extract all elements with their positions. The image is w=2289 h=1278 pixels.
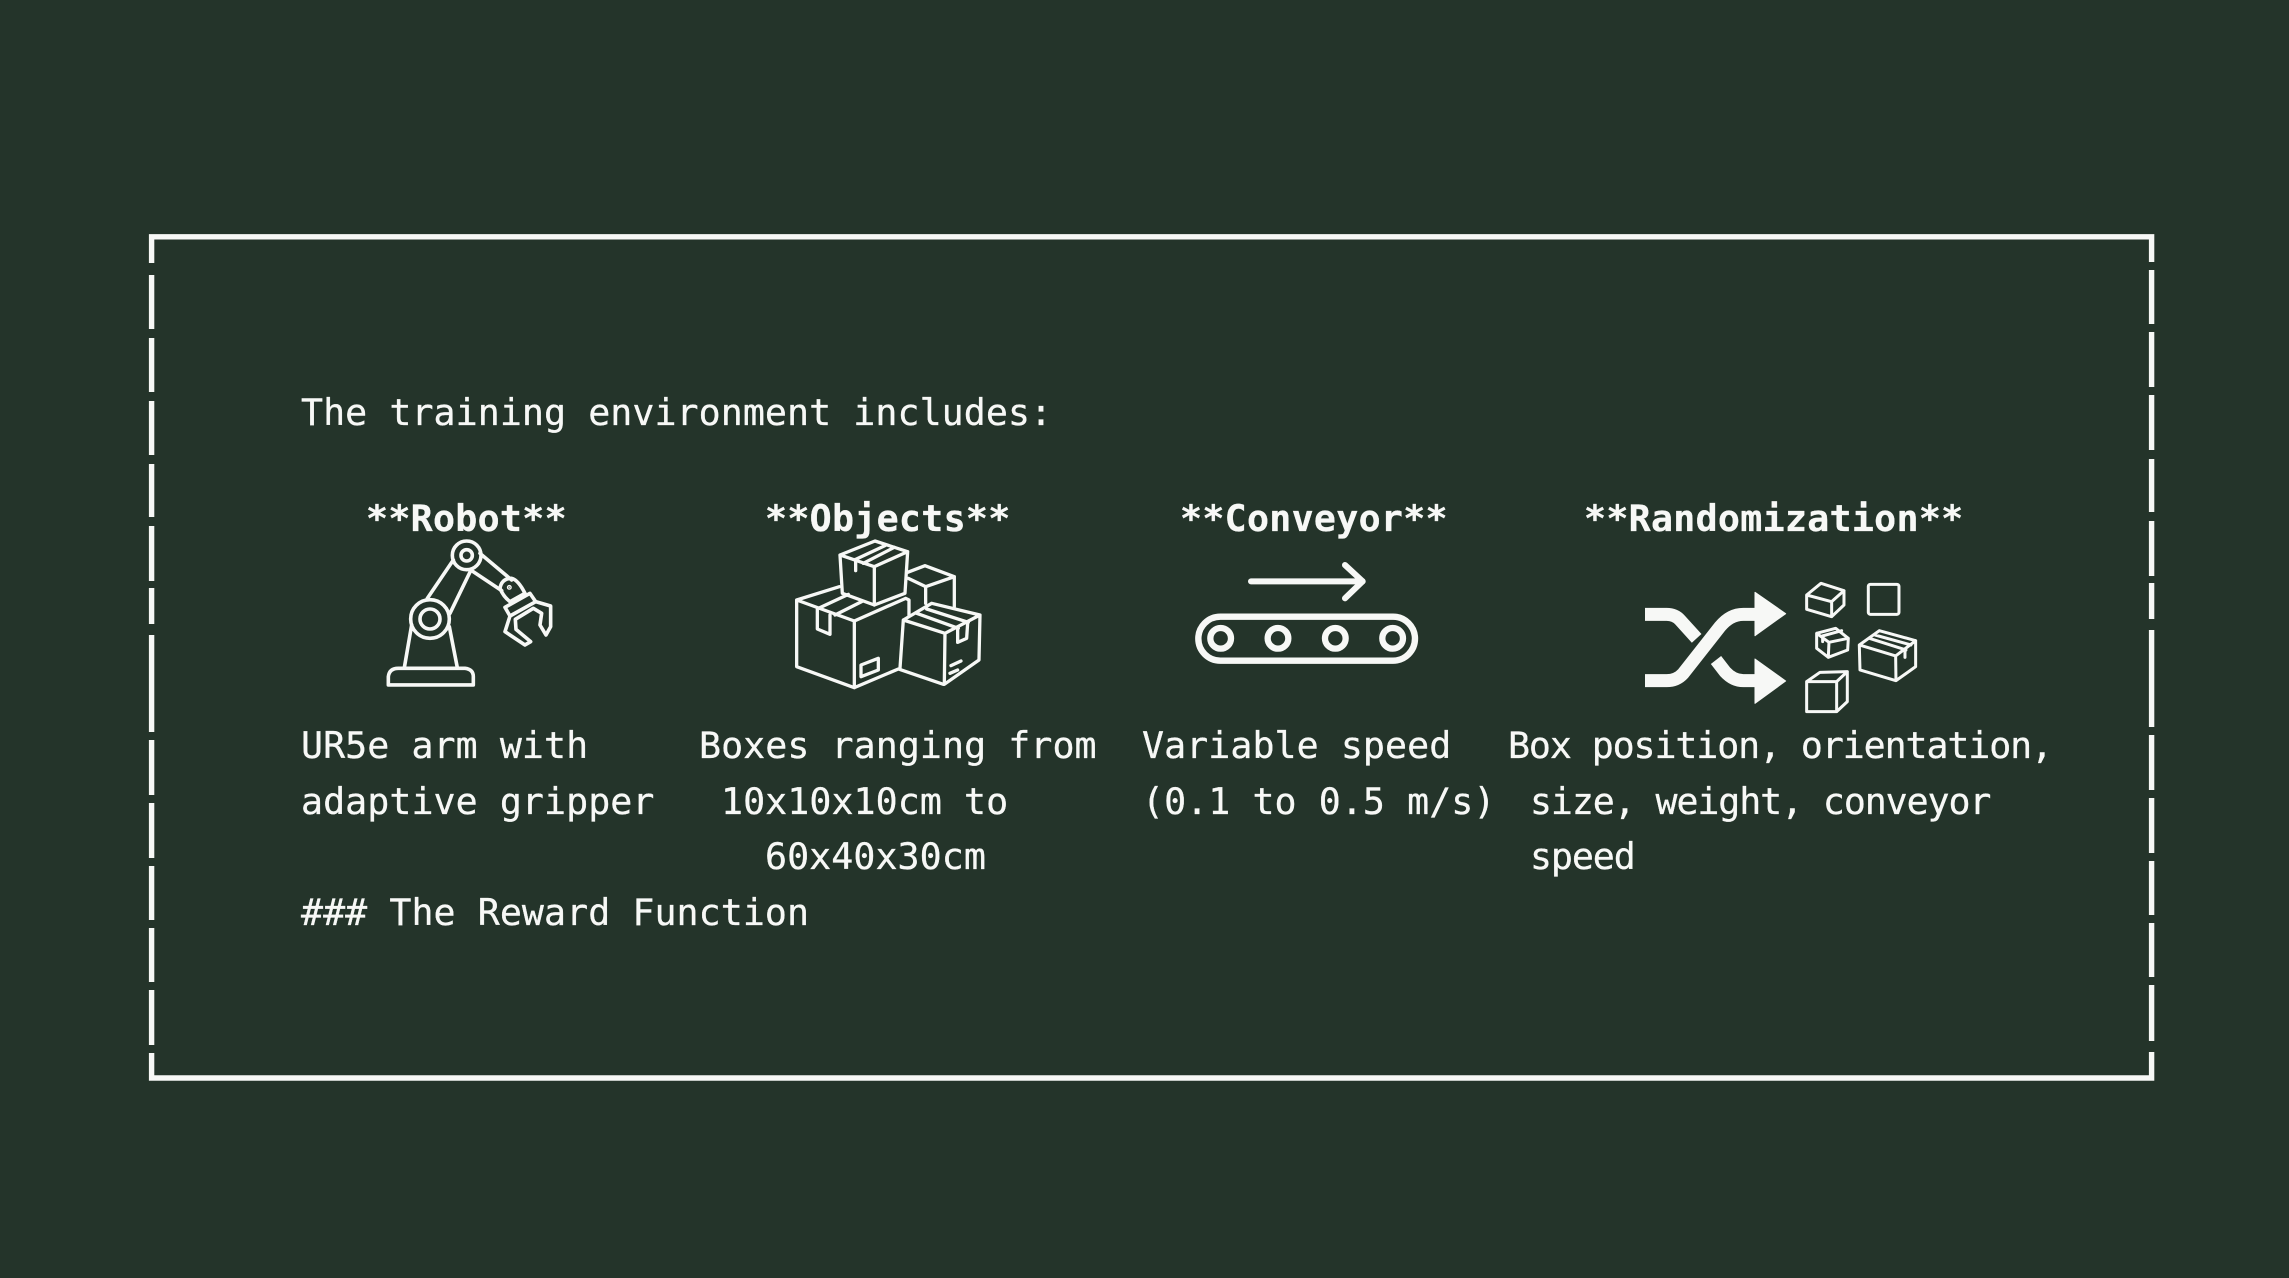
section heading text: ### The Reward Function xyxy=(301,891,809,934)
icon: stacked boxes xyxy=(795,539,982,690)
description: Randomization xyxy=(1508,724,2052,878)
description: Robot: adaptive gripper xyxy=(301,780,654,822)
panel: Robot xyxy=(301,497,654,822)
description: Objects xyxy=(699,724,1097,878)
description: Objects: 60x40x30cm xyxy=(765,835,986,878)
heading: Robot: **Robot** xyxy=(366,497,567,540)
heading: Conveyor: **Conveyor** xyxy=(1180,497,1448,540)
description: Robot xyxy=(301,724,654,822)
dashed frame xyxy=(148,234,2154,1081)
heading: Objects: **Objects** xyxy=(765,497,1011,540)
intro text: The training environment includes: xyxy=(301,390,1052,434)
panel: Conveyor xyxy=(1142,497,1495,822)
description: Randomization: speed xyxy=(1530,835,1635,878)
panel: Objects xyxy=(699,497,1097,878)
description: Conveyor: (0.1 to 0.5 m/s) xyxy=(1142,780,1495,822)
description: Conveyor: Variable speed xyxy=(1142,724,1451,767)
description: Objects: Boxes ranging from xyxy=(699,724,1097,767)
description: Randomization: Box position, orientation, xyxy=(1508,724,2052,767)
description: Randomization: size, weight, conveyor xyxy=(1530,780,1990,822)
icon: shuffle arrows and boxes xyxy=(1645,582,1918,714)
panel: Randomization xyxy=(1508,497,2052,878)
icon: conveyor belt xyxy=(1195,562,1418,664)
description: Conveyor xyxy=(1142,724,1495,822)
description: Objects: 10x10x10cm to xyxy=(721,780,1008,822)
heading: Randomization: **Randomization** xyxy=(1584,497,1963,540)
description: Robot: UR5e arm with xyxy=(301,724,588,767)
icon: robot arm xyxy=(386,539,552,687)
